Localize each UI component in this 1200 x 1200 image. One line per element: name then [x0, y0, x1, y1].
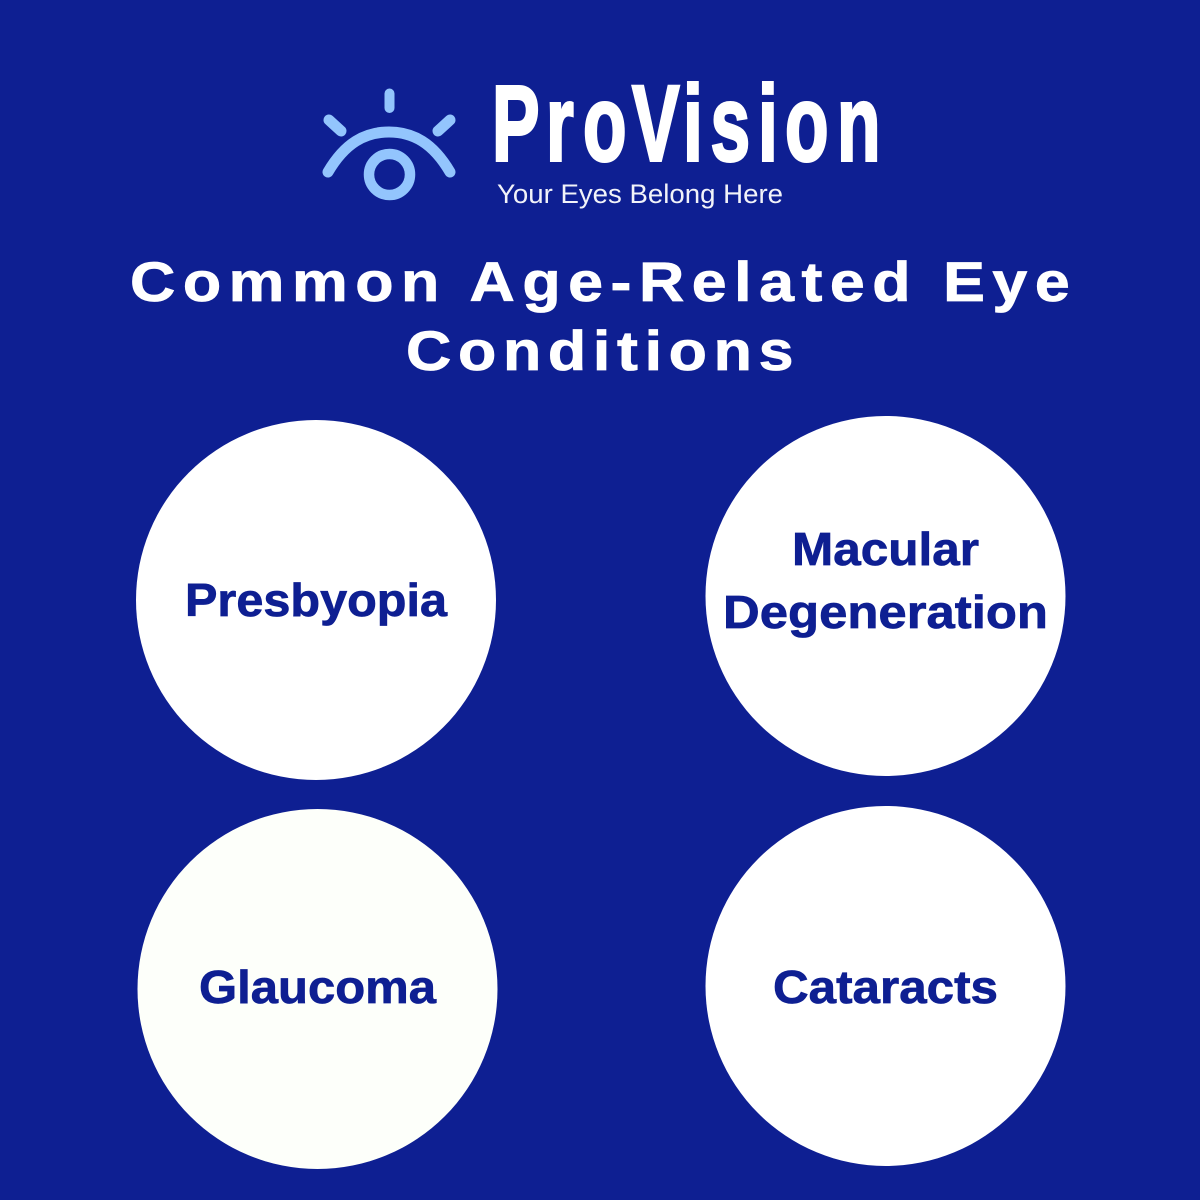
label: Macular Degeneration: Degeneration	[723, 586, 1048, 638]
panel: Glaucoma	[138, 809, 498, 1169]
icon: eye with rays	[328, 94, 450, 195]
panel: Macular Degeneration	[706, 416, 1066, 776]
tagline: Your Eyes Belong Here	[497, 179, 783, 209]
logo	[328, 64, 881, 209]
title: Conditions	[406, 319, 794, 382]
label: Presbyopia: Presbyopia	[185, 574, 447, 626]
label: Cataracts: Cataracts	[773, 961, 998, 1013]
title	[130, 250, 1070, 382]
label: Macular Degeneration: Macular	[792, 523, 979, 575]
panel: Presbyopia	[136, 420, 496, 780]
panel: Cataracts	[706, 806, 1066, 1166]
title: Common Age-Related Eye	[130, 250, 1070, 313]
label: Macular Degeneration	[723, 523, 1048, 638]
label: Glaucoma: Glaucoma	[199, 961, 436, 1013]
brand name: ProVision	[492, 64, 881, 184]
